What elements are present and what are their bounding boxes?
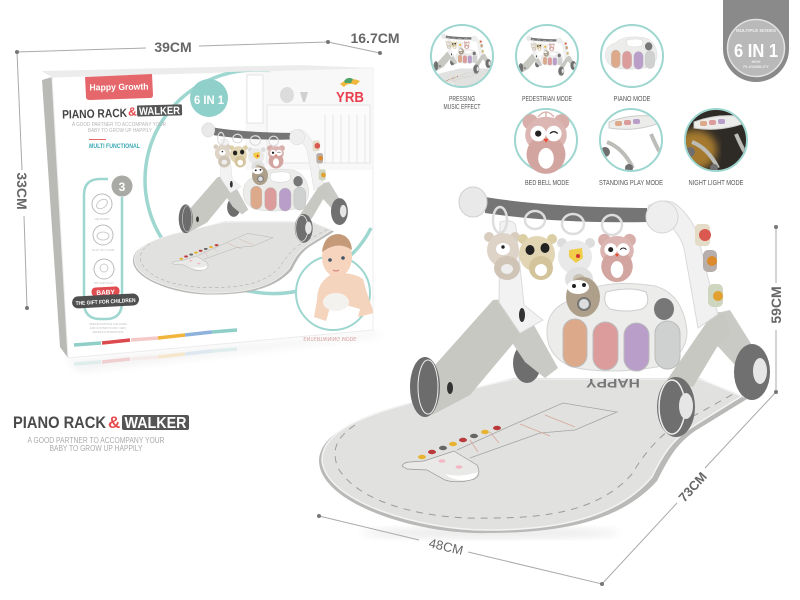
mode: pressing music effect: MUSIC EFFECT: [444, 104, 481, 111]
box fine print: SPECIFICATIONS COLOURS: [89, 322, 127, 326]
box dimensions: [14, 30, 400, 310]
YRB logo: YRB: [336, 89, 364, 106]
48CM label: 48CM: [427, 535, 465, 558]
mode: pressing music effect: [429, 25, 498, 111]
mode captions: [92, 217, 115, 285]
page subtitle: A GOOD PARTNER TO ACCOMPANY YOUR: [28, 436, 165, 445]
brand tag: Happy Growth: [89, 81, 149, 93]
6 in 1 corner badge: [723, 0, 789, 82]
baby ribbon: [71, 285, 139, 309]
product dimensions: [317, 225, 784, 586]
mode captions: LIE DOWN: [95, 217, 109, 221]
nursery background: [245, 68, 373, 170]
mode: pressing music effect: PRESSING: [449, 96, 475, 103]
box subtitle: BABY TO GROW UP HAPPILY: [88, 128, 153, 134]
mode: night light: NIGHT LIGHT MODE: [688, 180, 744, 187]
page title: [13, 413, 189, 432]
6 in 1 corner badge: 6 IN 1: [734, 41, 778, 61]
6 in 1 teal badge: 6 IN 1: [194, 93, 224, 107]
page title: PIANO RACK: [13, 413, 107, 432]
3 modes badge: [112, 176, 132, 196]
mat printed HAPPY text: HAPPY: [585, 376, 640, 390]
33CM label: 33CM: [14, 172, 30, 210]
baby circle: [296, 256, 370, 330]
box subtitle: [72, 122, 166, 134]
box title: WALKER: [139, 105, 180, 118]
59CM label: 59CM: [768, 286, 784, 324]
box subtitle: A GOOD PARTNER TO ACCOMPANY YOUR: [72, 122, 166, 128]
mirrored reflection caption: ENTERTAINING MODE: [303, 335, 357, 341]
stripe reflection: [74, 349, 237, 364]
mode: bed bell: BED BELL MODE: [525, 180, 569, 187]
box side panel: [42, 77, 68, 358]
mode: pedestrian: PEDESTRIAN MODE: [522, 96, 572, 103]
multi functional heading: MULTI FUNCTIONAL: [89, 143, 140, 150]
modes panel: [84, 176, 132, 319]
box fine print: FROM ILLUSTRATIONS: [93, 330, 123, 334]
box fine print: [89, 322, 127, 334]
6 in 1 corner badge: HIGH: [752, 60, 761, 64]
mode: night light: [684, 108, 748, 185]
baby ribbon: THE GIFT FOR CHILDREN: [76, 298, 136, 307]
mode: piano: PIANO MODE: [614, 96, 651, 103]
main product: walker: [410, 187, 770, 437]
mode captions: SIT AND PLAY: [94, 281, 114, 285]
73CM label: 73CM: [675, 469, 710, 505]
mode: pedestrian: [516, 25, 578, 103]
page subtitle: [28, 436, 165, 453]
16.7CM label: 16.7CM: [350, 30, 400, 46]
baby silhouettes: [95, 197, 109, 272]
mode icons: [92, 194, 114, 279]
modes grid: [430, 24, 748, 185]
baby: [314, 234, 374, 321]
brand tag: [85, 74, 153, 100]
mode: bed bell: [515, 109, 577, 187]
6 in 1 teal badge: [190, 79, 228, 117]
page subtitle: BABY TO GROW UP HAPPILY: [50, 444, 143, 453]
6 in 1 corner badge: PLAYABILITY: [743, 64, 769, 69]
box title: &: [128, 105, 137, 119]
box title: [62, 103, 182, 122]
box shadow: [66, 332, 385, 372]
box front face: [52, 68, 373, 358]
multi functional heading: [89, 139, 140, 150]
mode: piano: [601, 25, 663, 103]
miniature toy: [133, 222, 334, 295]
box fine print: AND CONTENTS MAY VARY: [90, 326, 127, 330]
mode: standing play: [599, 108, 663, 185]
3 modes badge: 3: [119, 180, 126, 194]
box title: PIANO RACK: [62, 106, 128, 122]
teal arc: [145, 70, 371, 294]
baby ribbon: BABY: [96, 289, 116, 297]
main product: play mat: [319, 378, 747, 539]
mode captions: PLAY ON YOUR: [92, 248, 115, 252]
6 in 1 corner badge: MULTIPLE MODES: [736, 28, 776, 33]
page title: &: [108, 413, 120, 432]
YRB logo: [336, 78, 364, 106]
box artwork: [133, 68, 374, 330]
box top edge: [41, 65, 373, 77]
mode: standing play: STANDING PLAY MODE: [599, 180, 663, 187]
page title: WALKER: [124, 415, 187, 432]
product box: [41, 65, 385, 372]
colour stripe: [74, 330, 237, 345]
39CM label: 39CM: [154, 39, 192, 55]
